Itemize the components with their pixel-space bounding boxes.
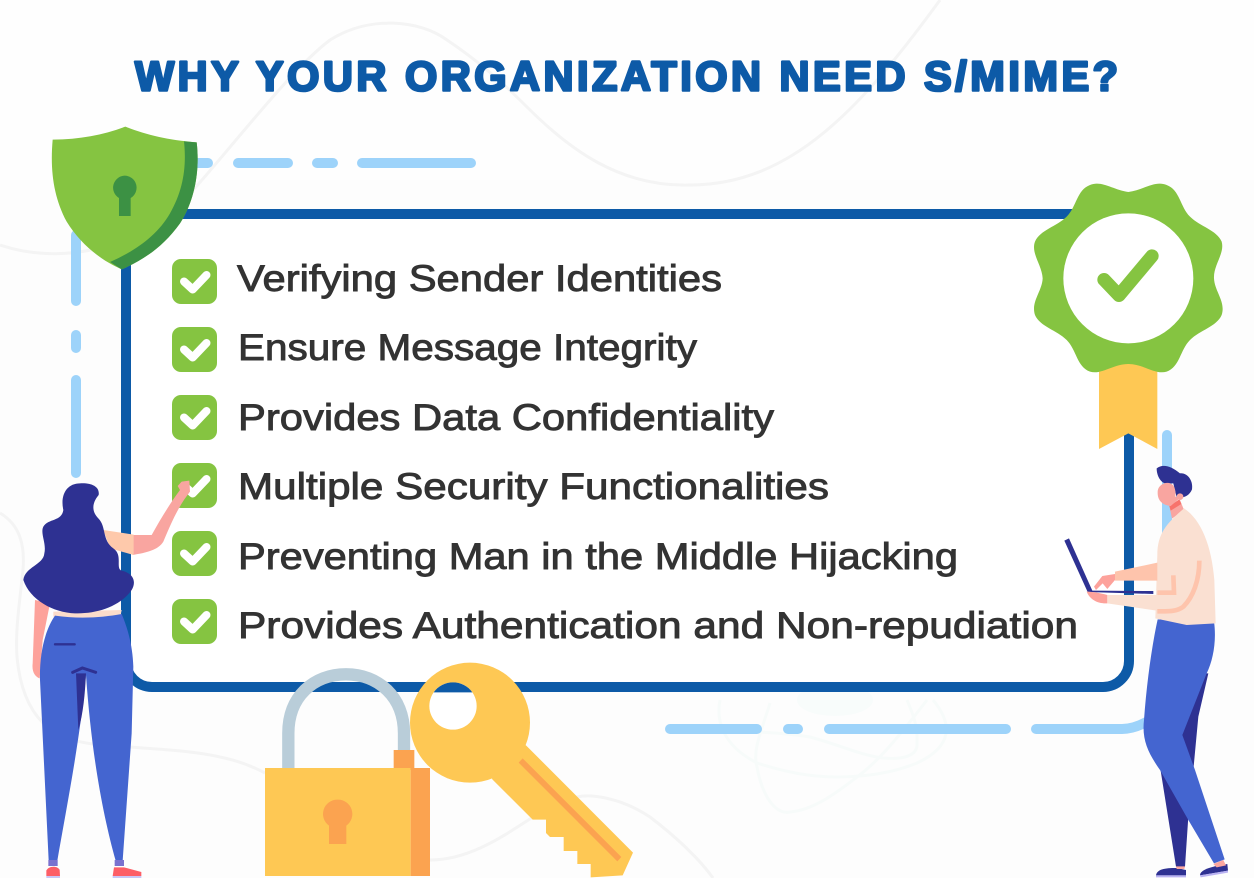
neck: [1169, 500, 1184, 519]
title: WHY YOUR ORGANIZATION NEED S/MIME?: [135, 52, 1118, 100]
item 4: Multiple Security Functionalities: [238, 466, 829, 507]
front leg: [1144, 619, 1225, 863]
icon: padlock and key: [265, 663, 633, 877]
upper arm: [1115, 563, 1157, 581]
sleeve seams: [1157, 561, 1199, 611]
item 5: Preventing Man in the Middle Hijacking: [238, 536, 958, 577]
head: [1158, 483, 1179, 506]
dashed connector: bottom: [670, 720, 1150, 729]
illustration: woman pointing: [23, 481, 190, 878]
dashed connector: left: [71, 235, 81, 473]
illustration: man with laptop: [1064, 466, 1228, 877]
hair: [1157, 466, 1192, 498]
front hand: [1087, 592, 1107, 603]
item 1: Verifying Sender Identities: [237, 258, 722, 299]
back hand: [1094, 574, 1115, 590]
key: [410, 663, 633, 877]
padlock: [265, 674, 430, 876]
hair: [23, 483, 134, 613]
forearm: [1107, 595, 1157, 611]
item 2: Ensure Message Integrity: [238, 327, 698, 368]
arm: [133, 481, 190, 555]
shoes: [48, 860, 58, 866]
item 1: [172, 258, 722, 304]
benefits list: [172, 258, 1078, 646]
item 6: Provides Authentication and Non-repudiation: [238, 605, 1078, 646]
item 3: Provides Data Confidentiality: [238, 397, 775, 438]
back leg: [1160, 673, 1208, 867]
trousers: [40, 614, 133, 861]
panel: benefits frame: [126, 214, 1129, 687]
icon: rosette badge with check: [1034, 184, 1223, 449]
sweater: [1155, 508, 1216, 625]
shoes: [1156, 868, 1186, 875]
icon: shield with keyhole: [52, 127, 198, 269]
ribbon: [1099, 360, 1157, 449]
dashed connector: top: [195, 158, 471, 168]
dashed connector: right: [1162, 435, 1172, 540]
laptop: [1064, 538, 1153, 594]
